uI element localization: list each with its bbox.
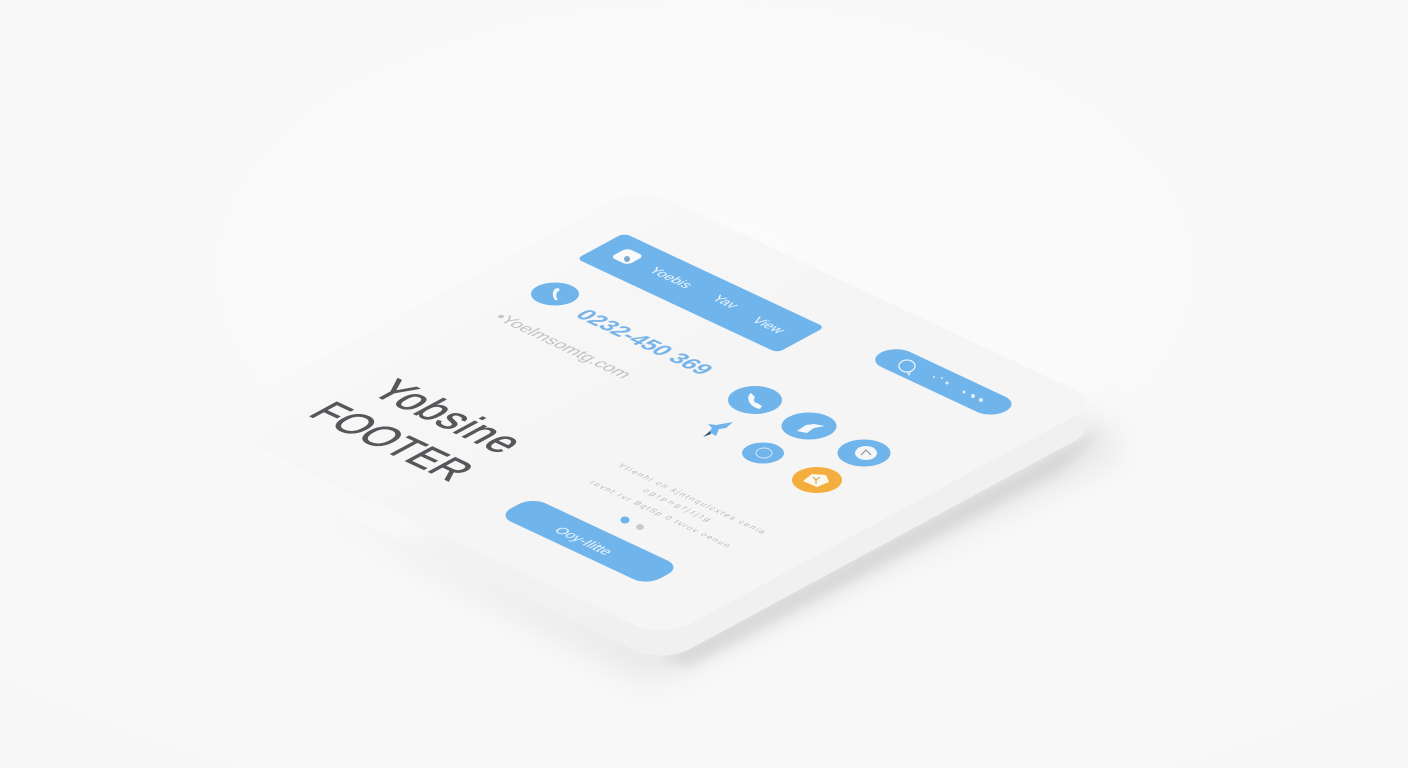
button label: Ooy-Ilitte: [549, 525, 616, 557]
call-to-action button: [498, 497, 681, 586]
icon: swirl circle: [742, 442, 784, 464]
icon: app badge: [610, 248, 644, 265]
banner labels: Yav: [708, 293, 743, 310]
icon: phone circle: [728, 386, 782, 414]
search pill: [867, 345, 1020, 419]
icon: orange badge: [792, 467, 842, 493]
icon: search bubble: [899, 360, 915, 375]
banner labels: [645, 265, 790, 336]
pill dots: [933, 376, 983, 402]
icon: blue bird: [703, 422, 733, 437]
pagination dots: [620, 516, 644, 530]
top blue banner: [576, 233, 825, 353]
description text: ogtpngfjtjtg: [640, 487, 714, 523]
icon: message circle: [838, 440, 890, 466]
card shadow: [300, 415, 1130, 680]
card edge: [203, 211, 1101, 663]
title: [298, 374, 537, 487]
card top surface: [203, 186, 1101, 638]
icon: plane circle: [782, 412, 836, 440]
email address: •Yoelmsomtg.com: [489, 310, 637, 381]
banner labels: View: [748, 315, 790, 336]
description text: revnt rvr BqtSp 0 tvrov oenun: [587, 479, 734, 549]
icon: phone badge: [531, 282, 579, 306]
description text: Ytienhl on kjntnqulcxtes cenia: [615, 462, 769, 535]
title: FOOTER: [298, 396, 485, 487]
title: Yobsine: [360, 374, 537, 460]
banner labels: Yoebis: [645, 265, 697, 290]
phone number: 0232-450 369: [570, 306, 720, 378]
